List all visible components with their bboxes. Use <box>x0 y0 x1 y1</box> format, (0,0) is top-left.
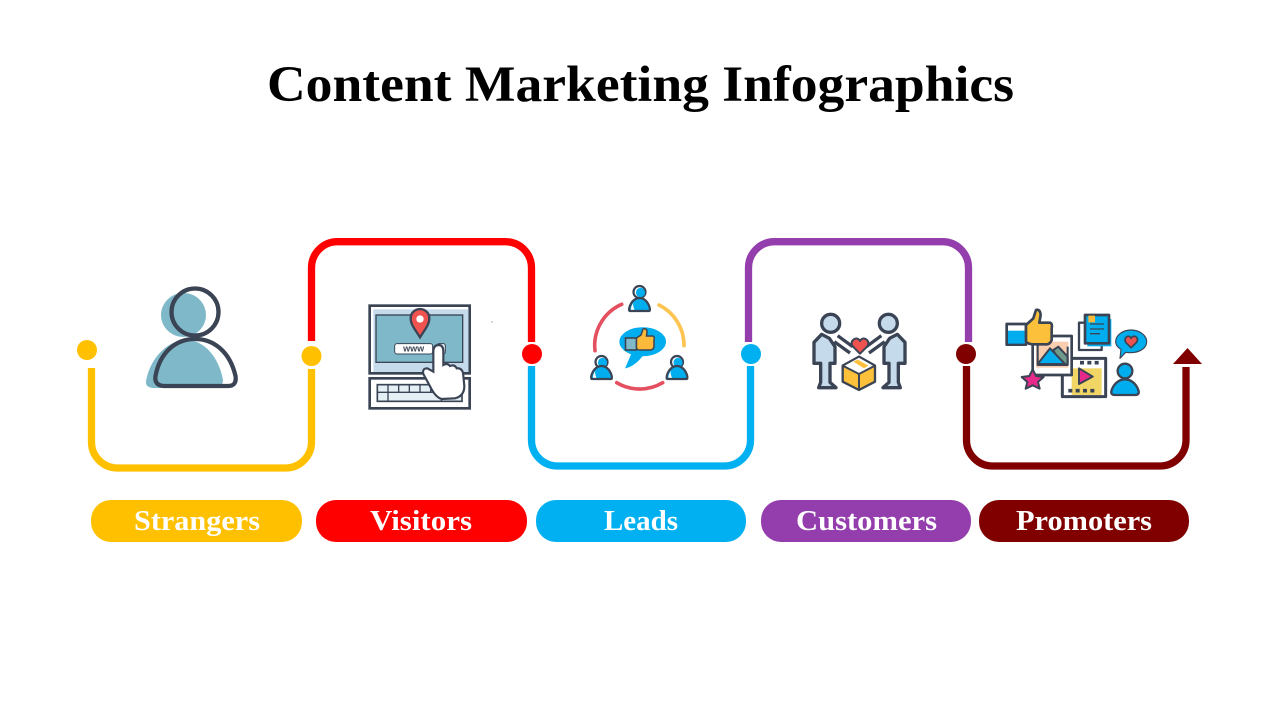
label: visitors: Visitors <box>370 505 472 537</box>
label: leads: Leads <box>604 505 678 537</box>
dot: start yellow <box>77 340 97 360</box>
path segment: leads blue <box>532 366 750 466</box>
arrow head <box>1173 348 1202 364</box>
icon: customers handshake with box <box>814 314 905 390</box>
label: promoters <box>979 500 1189 542</box>
title: Content Marketing Infographics <box>267 57 1014 113</box>
label: strangers <box>91 500 302 542</box>
path segment: visitors red <box>312 242 532 342</box>
icon: promoters content collage <box>1007 310 1147 397</box>
icon: computer with pointer <box>370 306 470 408</box>
label: leads <box>536 500 746 542</box>
dot: blue to purple <box>741 344 761 364</box>
icon: computer with pointer: www <box>402 344 424 354</box>
speck <box>491 321 493 323</box>
path segment: customers purple <box>748 242 968 342</box>
dot: purple to maroon <box>956 344 976 364</box>
dot: yellow to red <box>302 346 322 366</box>
label: promoters: Promoters <box>1016 505 1152 537</box>
label: customers <box>761 500 971 542</box>
dot: red to blue <box>522 344 542 364</box>
icon: leads network <box>591 286 687 389</box>
icon: stranger person <box>146 288 236 388</box>
label: customers: Customers <box>796 505 937 537</box>
path segment: promoters maroon <box>966 366 1186 466</box>
path segment: strangers yellow <box>92 368 312 468</box>
label: visitors <box>316 500 527 542</box>
label: strangers: Strangers <box>134 505 260 537</box>
